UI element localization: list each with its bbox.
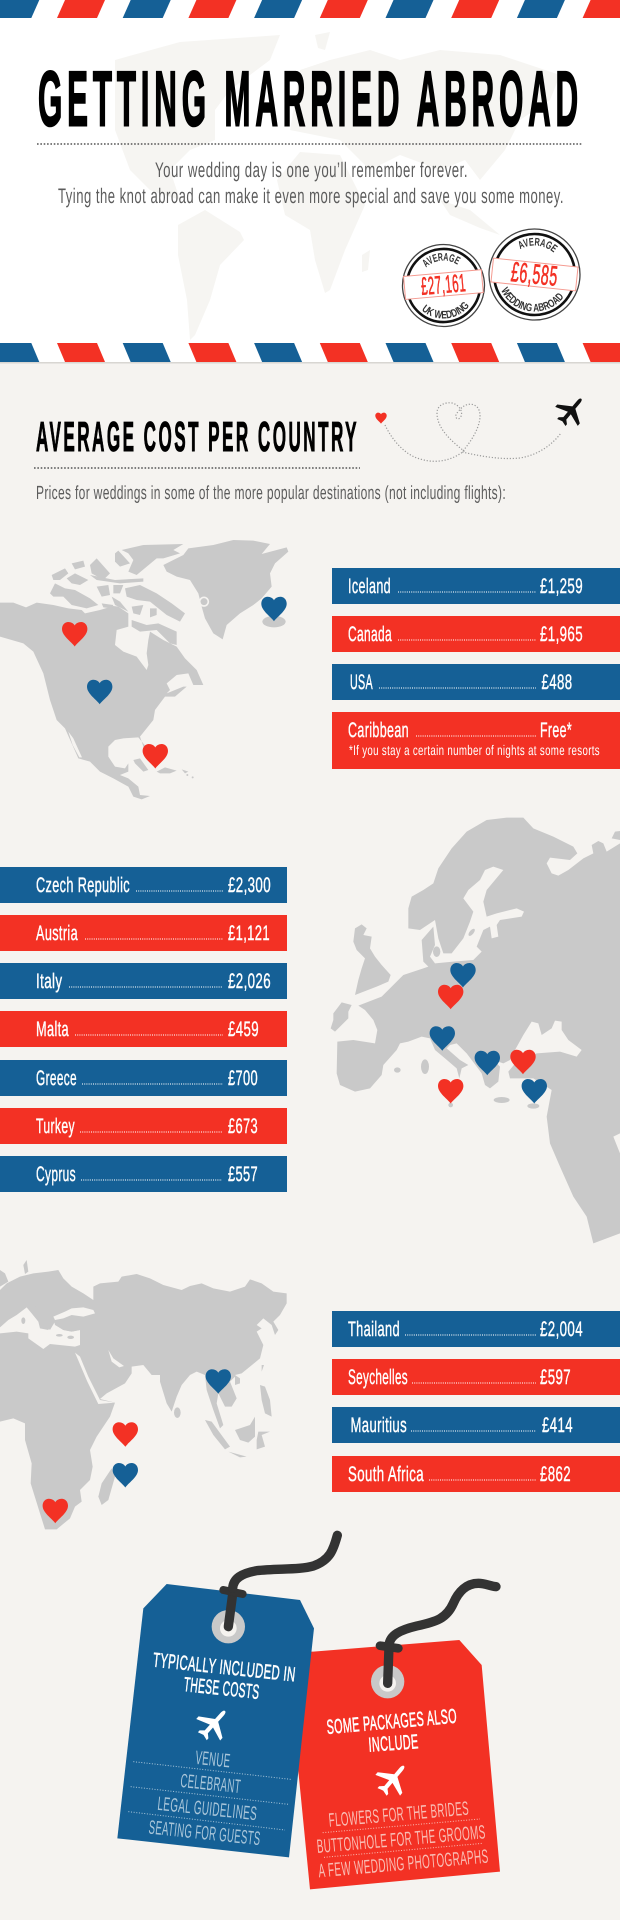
stamp: average UK wedding bbox=[402, 244, 486, 328]
bar: Malta: £459 bbox=[228, 1018, 259, 1041]
tag: typically included in these costs: VENUE bbox=[194, 1747, 232, 1772]
bar: Austria bbox=[0, 915, 287, 951]
tag: typically included in these costs: SEATING FOR GUESTS bbox=[148, 1816, 262, 1850]
heart markers: North America bbox=[62, 597, 287, 768]
price list: Americas bbox=[332, 568, 620, 769]
bar: Greece: Greece bbox=[36, 1067, 77, 1090]
bar: Turkey bbox=[0, 1108, 287, 1144]
bar: Seychelles: Seychelles bbox=[348, 1366, 408, 1389]
tag: typically included in these costs: TYPICALLY INCLUDED IN bbox=[152, 1648, 297, 1686]
price list: Europe bbox=[0, 867, 287, 1192]
bar: Cyprus bbox=[0, 1156, 287, 1192]
bar: Austria: Austria bbox=[36, 922, 78, 945]
flight path with heart bbox=[375, 403, 561, 461]
bar: Czech Republic bbox=[0, 867, 287, 903]
bar: Greece: £700 bbox=[228, 1067, 258, 1090]
bar: Caribbean: Caribbean bbox=[348, 719, 409, 742]
bar: Iceland bbox=[332, 568, 620, 604]
map: Africa and Asia bbox=[0, 1260, 287, 1529]
faint world map bbox=[115, 32, 560, 340]
bar: Greece bbox=[0, 1060, 287, 1096]
tag: typically included in these costs bbox=[117, 1535, 337, 1857]
heart markers: Europe bbox=[430, 963, 547, 1104]
stamp: average UK wedding: AVERAGE bbox=[422, 253, 461, 268]
bottom airmail stripes bbox=[0, 343, 620, 362]
stamp: average wedding abroad bbox=[488, 228, 581, 321]
header panel bbox=[0, 0, 620, 364]
bar: South Africa bbox=[332, 1456, 620, 1492]
bar: Malta bbox=[0, 1011, 287, 1047]
bar: Thailand bbox=[332, 1311, 620, 1347]
bar: Canada: £1,965 bbox=[540, 623, 583, 646]
bar: Seychelles: £597 bbox=[540, 1366, 571, 1389]
stamp: average wedding abroad: WEDDING ABROAD bbox=[502, 286, 563, 312]
bar: Malta: Malta bbox=[36, 1018, 69, 1041]
bar: Italy bbox=[0, 963, 287, 999]
map: Europe bbox=[331, 818, 620, 1243]
bar: Iceland: Iceland bbox=[348, 575, 391, 598]
stamp: average wedding abroad: AVERAGE bbox=[518, 238, 558, 252]
heart markers: Africa and Asia bbox=[43, 1369, 231, 1523]
bar: South Africa: £862 bbox=[540, 1463, 571, 1486]
tag: typically included in these costs: LEGAL GUIDELINES bbox=[156, 1793, 258, 1825]
bar: Thailand: Thailand bbox=[348, 1318, 400, 1341]
bar: Italy: Italy bbox=[36, 970, 62, 993]
bar: Mauritius: Mauritius bbox=[350, 1414, 407, 1437]
bar: Turkey: Turkey bbox=[36, 1115, 75, 1138]
bar: Czech Republic: Czech Republic bbox=[36, 874, 130, 897]
tag: some packages also include: SOME PACKAGES ALSO bbox=[326, 1704, 458, 1738]
luggage tags bbox=[117, 1535, 500, 1889]
tag: some packages also include: FLOWERS FOR THE BRIDES bbox=[328, 1797, 470, 1831]
top airmail stripes bbox=[0, 0, 620, 18]
stamp: average UK wedding: UK WEDDING bbox=[422, 302, 468, 318]
bar: USA bbox=[332, 664, 620, 700]
map: North America bbox=[0, 540, 288, 799]
bar: Canada: Canada bbox=[348, 623, 392, 646]
tag: some packages also include bbox=[288, 1583, 500, 1889]
stamp: average UK wedding: £27,161 bbox=[420, 269, 467, 301]
bar: Iceland: £1,259 bbox=[540, 575, 583, 598]
bar: USA: £488 bbox=[542, 671, 572, 694]
bar: Caribbean bbox=[332, 712, 620, 769]
intro text bbox=[58, 159, 564, 208]
bar: Canada bbox=[332, 616, 620, 652]
bar: USA: USA bbox=[350, 671, 373, 694]
bar: Mauritius bbox=[332, 1407, 620, 1443]
bar: Cyprus: £557 bbox=[228, 1163, 258, 1186]
tag: typically included in these costs: CELEBRANT bbox=[179, 1770, 242, 1797]
bar: Cyprus: Cyprus bbox=[36, 1163, 76, 1186]
bar: Thailand: £2,004 bbox=[540, 1318, 583, 1341]
bar: Seychelles bbox=[332, 1359, 620, 1395]
price list: Asia and Africa bbox=[332, 1311, 620, 1492]
bar: Czech Republic: £2,300 bbox=[228, 874, 271, 897]
tag: some packages also include: INCLUDE bbox=[368, 1730, 419, 1756]
icon: plane bbox=[550, 389, 593, 432]
stamp: average wedding abroad: £6,585 bbox=[510, 256, 560, 292]
bar: South Africa: South Africa bbox=[348, 1463, 424, 1486]
bar: Caribbean: Free* bbox=[540, 719, 572, 742]
bar: Turkey: £673 bbox=[228, 1115, 258, 1138]
bar: Austria: £1,121 bbox=[228, 922, 270, 945]
bar: Italy: £2,026 bbox=[228, 970, 271, 993]
tag: typically included in these costs: THESE COSTS bbox=[183, 1673, 261, 1703]
bar: Mauritius: £414 bbox=[542, 1414, 573, 1437]
